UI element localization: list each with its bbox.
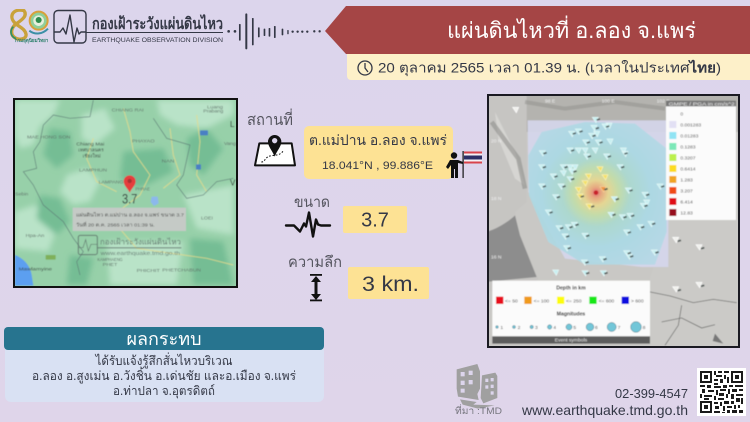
station markers bbox=[539, 117, 663, 276]
panel: shake map bbox=[485, 92, 742, 352]
magnitude value box: 3.7 bbox=[361, 210, 389, 232]
graticule labels: 18 N bbox=[491, 196, 502, 202]
map watermark: www.earthquake.tmd.go.th bbox=[99, 251, 180, 257]
depth and magnitude legend: 5 bbox=[573, 325, 576, 331]
panel: location map: เทศบาลนคร bbox=[78, 147, 104, 152]
location name: ต.แม่ปาน อ.ลอง จ.แพร่ bbox=[309, 132, 447, 148]
shake map colour legend: 1.283 bbox=[680, 177, 693, 183]
depth and magnitude legend: Magnitudes bbox=[557, 311, 585, 317]
magnitude value box bbox=[343, 206, 407, 233]
graticule labels: 20 N bbox=[491, 139, 502, 145]
map labels: MAE HONG SON bbox=[27, 135, 70, 140]
depth and magnitude legend: 1 bbox=[500, 325, 503, 331]
map labels: PHICHIT bbox=[137, 268, 160, 273]
panel: location map: L bbox=[230, 120, 235, 129]
shake map colour legend: 0.6414 bbox=[680, 166, 696, 172]
depth and magnitude legend: 4 bbox=[553, 325, 556, 331]
map labels: LAMPHUN bbox=[79, 167, 107, 172]
depth and magnitude legend: <= 600 bbox=[599, 298, 614, 304]
depth value box bbox=[348, 267, 429, 299]
division name in English: EARTHQUAKE OBSERVATION DIVISION bbox=[92, 37, 223, 44]
QR code bbox=[697, 368, 746, 416]
phone number: 02-399-4547 bbox=[615, 387, 688, 401]
icon: map with pin bbox=[255, 135, 295, 165]
panel: location map: เชียงใหม่ bbox=[83, 152, 101, 158]
land and sea tones bbox=[526, 96, 738, 132]
shake map colour legend: 0.01283 bbox=[680, 133, 699, 139]
map labels: LAMPANG bbox=[99, 180, 124, 185]
shake map colour legend: 0.1283 bbox=[680, 144, 696, 150]
map labels: CHIANG RAI bbox=[112, 107, 144, 112]
icon: seismograph box bbox=[54, 10, 86, 43]
panel: location map: V bbox=[230, 179, 236, 188]
map terrain bbox=[15, 100, 233, 285]
shake intensity field bbox=[528, 120, 668, 267]
sound wave decoration bbox=[227, 13, 321, 49]
shake map colour legend: 0.3207 bbox=[680, 155, 696, 161]
magnitude on map: 3.7 bbox=[122, 192, 137, 207]
impact text: อ.ท่าปลา จ.อุตรดิตถ์ bbox=[113, 384, 215, 399]
heading: location: สถานที่ bbox=[247, 108, 293, 129]
map caption box: แผ่นดินไหว ต.แม่ปาน อ.ลอง จ.แพร่ ขนาด 3.7 bbox=[76, 211, 184, 218]
impact text: อ.ลอง อ.สูงเม่น อ.วังชิ้น อ.เด่นชัย และอ.เมือง จ.แพร่ bbox=[32, 366, 296, 384]
map labels: Luang bbox=[207, 104, 224, 109]
depth and magnitude legend: > 600 bbox=[631, 298, 644, 304]
graticule labels bbox=[491, 99, 670, 261]
panel: location map: Chiang Mai bbox=[76, 141, 104, 147]
impact text bbox=[32, 352, 296, 399]
map caption box bbox=[73, 208, 186, 231]
map labels: NAN bbox=[162, 159, 174, 164]
heading: depth: ความลึก bbox=[288, 254, 342, 271]
panel: location map: Mawlamyine bbox=[19, 266, 53, 271]
impact heading: ผลกระทบ bbox=[126, 329, 202, 349]
borders bbox=[23, 100, 233, 275]
heading: magnitude: ขนาด bbox=[294, 194, 330, 211]
coordinates: 18.041°N , 99.886°E bbox=[322, 160, 433, 172]
shake map colour legend: GMPE / PGA in cm/s^2 bbox=[669, 101, 735, 107]
date text: 20 ตุลาคม 2565 เวลา 01.39 น. (เวลาในประเทศ ไทย) bbox=[378, 58, 721, 76]
title: แผ่นดินไหวที่ อ.ลอง จ.แพร่ bbox=[447, 15, 696, 43]
division name: กองเฝ้าระวังแผ่นดินไหว bbox=[92, 14, 223, 33]
icon: seismic wave bbox=[286, 212, 330, 236]
depth and magnitude legend: 3 bbox=[535, 325, 538, 331]
map labels: KAMPHAENG bbox=[97, 257, 123, 262]
shake map colour legend bbox=[666, 101, 736, 220]
shake map colour legend: 0.001283 bbox=[680, 122, 701, 128]
map labels: PHET bbox=[103, 262, 118, 267]
map caption box: วันที่ 20 ต.ค. 2565 เวลา 01:39 น. bbox=[76, 222, 155, 229]
depth and magnitude legend: 7 bbox=[618, 325, 621, 331]
icon: depth arrow bbox=[310, 274, 322, 301]
depth and magnitude legend: 8 bbox=[643, 325, 646, 331]
map watermark bbox=[78, 235, 181, 257]
logo: department 80th anniversary: กรมอุตุนิยมวิทยา bbox=[15, 37, 49, 44]
depth and magnitude legend bbox=[492, 281, 650, 344]
depth and magnitude legend: Depth in km bbox=[556, 286, 586, 292]
icon: collapsing buildings bbox=[457, 364, 497, 409]
shake map colour legend: 12.83 bbox=[680, 210, 693, 216]
website: www.earthquake.tmd.go.th bbox=[521, 402, 688, 418]
depth and magnitude legend: <= 100 bbox=[534, 298, 549, 304]
impact heading bbox=[4, 327, 324, 350]
depth and magnitude legend: <= 50 bbox=[505, 298, 518, 304]
impact text: ได้รับแจ้งรู้สึกสั่นไหวบริเวณ bbox=[95, 352, 233, 369]
map labels: Hpa-An bbox=[26, 233, 45, 238]
map labels: LOEI bbox=[201, 215, 213, 220]
panel: impact bbox=[4, 327, 324, 402]
graticule labels: 102 E bbox=[657, 99, 670, 105]
icon: person with Thai flag bbox=[446, 151, 482, 178]
location box bbox=[304, 126, 453, 179]
shake map colour legend: 0 bbox=[680, 111, 683, 117]
shake map colour legend: 3.207 bbox=[680, 188, 693, 194]
graticule labels: 100 E bbox=[602, 99, 615, 105]
depth and magnitude legend: <= 250 bbox=[566, 298, 582, 304]
logo: earthquake observation division bbox=[54, 10, 223, 44]
graticule labels: 98 E bbox=[545, 99, 556, 105]
shake map colour legend: 6.414 bbox=[680, 199, 693, 205]
road shields bbox=[200, 130, 208, 135]
icon: epicentre pin bbox=[124, 175, 136, 193]
depth and magnitude legend: 6 bbox=[595, 325, 598, 331]
map labels: PHETCHABUN bbox=[162, 268, 201, 273]
depth and magnitude legend: 2 bbox=[518, 325, 521, 331]
sea bbox=[15, 255, 33, 286]
panel: location map bbox=[12, 97, 239, 289]
map labels: Sebin bbox=[15, 192, 29, 197]
graticule labels: 16 N bbox=[491, 255, 502, 261]
map labels: Prabang bbox=[203, 109, 224, 114]
logo: department 80th anniversary bbox=[11, 10, 49, 44]
title banner bbox=[325, 6, 750, 54]
map labels: PHAYAO bbox=[132, 138, 155, 143]
map labels: PHRAE bbox=[135, 187, 150, 192]
map labels: Vang bbox=[224, 141, 237, 146]
roads and rivers bbox=[87, 108, 233, 265]
icon: clock bbox=[358, 61, 372, 75]
map watermark: กองเฝ้าระวังแผ่นดินไหว bbox=[100, 238, 181, 247]
map labels bbox=[15, 104, 237, 273]
depth and magnitude legend: Event symbols bbox=[555, 338, 588, 344]
source credit: ที่มา :TMD bbox=[455, 404, 502, 417]
depth value box: 3 km. bbox=[362, 273, 419, 296]
date bar bbox=[347, 54, 750, 80]
